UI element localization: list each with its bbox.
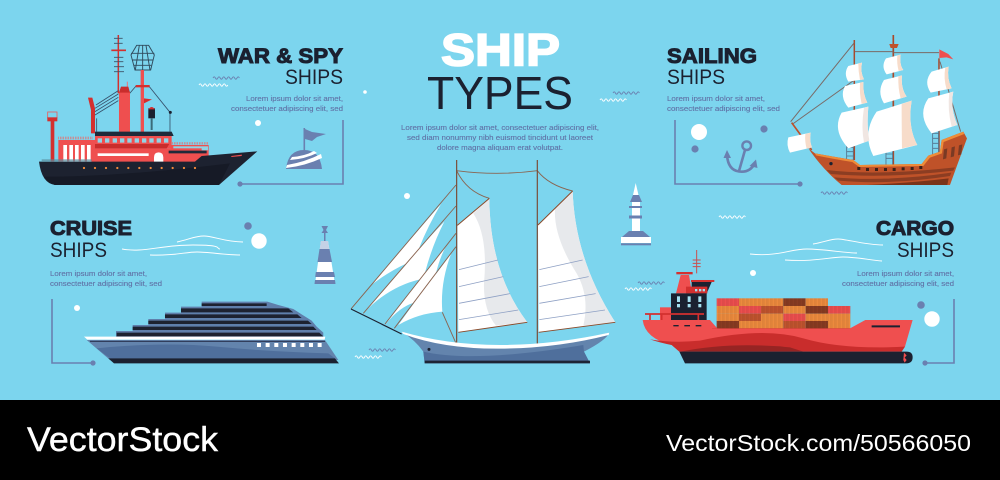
bent pipe <box>88 98 95 133</box>
heading: war and spy ships: SHIPS <box>285 66 343 89</box>
radar mast <box>136 70 152 133</box>
sailing ship <box>787 35 967 185</box>
upper decks <box>116 302 323 337</box>
intro text block: dolore magna aliquam erat volutpat. <box>437 143 563 152</box>
heading: sailing ships: Lorem ipsum dolor sit amet, <box>667 94 765 103</box>
heading: sailing ships: SAILING <box>667 45 757 68</box>
heading: cruise ships: CRUISE <box>50 218 132 240</box>
heading: cargo ships: consectetuer adipiscing elit, sed <box>842 279 954 288</box>
heading: cargo ships: CARGO <box>876 218 954 240</box>
title: TYPES <box>427 67 573 119</box>
foresails <box>363 204 451 325</box>
icon: striped buoy <box>314 226 336 284</box>
watermark bar: VectorStock <box>27 421 219 459</box>
icon: anchor <box>724 141 758 172</box>
intro text block: Lorem ipsum dolor sit amet, consectetuer adipiscing elit, <box>401 123 599 132</box>
heading: sailing ships <box>667 45 780 113</box>
red hull <box>643 320 913 363</box>
heading: war and spy ships: WAR & SPY <box>218 45 343 68</box>
masts <box>457 160 537 344</box>
central schooner <box>351 160 615 363</box>
intro text block: sed diam nonummy nibh euismod tincidunt ut laoreet <box>407 133 593 142</box>
watermark bar <box>0 400 1000 480</box>
lower hull <box>84 337 339 363</box>
intro text block <box>401 123 599 152</box>
funnel <box>119 87 130 133</box>
heading: war and spy ships: consectetuer adipiscing elit, sed <box>231 104 343 113</box>
title: SHIP <box>441 24 560 76</box>
sail shading <box>805 55 957 149</box>
heading: cruise ships: Lorem ipsum dolor sit amet, <box>50 269 147 278</box>
heading: cargo ships <box>842 218 954 288</box>
rear mast <box>47 112 57 162</box>
bowsprit <box>351 309 402 334</box>
antenna mast <box>111 35 127 93</box>
heading: sailing ships: SHIPS <box>667 66 725 89</box>
main sails <box>457 191 615 332</box>
heading: war and spy ships <box>218 45 343 113</box>
wooden hull <box>808 132 967 185</box>
rigging <box>95 86 170 132</box>
bridge <box>645 272 714 322</box>
watermark bar: VectorStock.com/50566050 <box>666 430 971 456</box>
heading: cruise ships: SHIPS <box>50 239 107 262</box>
title <box>427 24 573 119</box>
hull <box>39 151 257 185</box>
schooner hull <box>402 332 609 363</box>
heading: sailing ships: consectetuer adipiscing elit, sed <box>667 104 780 113</box>
cruise ship <box>84 302 339 363</box>
heading: cruise ships: consectetuer adipiscing elit, sed <box>50 279 162 288</box>
heading: cargo ships: SHIPS <box>897 239 954 262</box>
cargo ship <box>643 250 913 363</box>
antenna <box>693 250 701 273</box>
main superstructure <box>95 132 209 162</box>
heading: war and spy ships: Lorem ipsum dolor sit amet, <box>246 94 343 103</box>
war and spy ship <box>39 35 257 185</box>
crow's nest and flag <box>889 44 953 59</box>
icon: lighthouse <box>621 183 651 245</box>
heading: cruise ships <box>50 218 162 288</box>
containers <box>717 298 850 329</box>
lamp <box>148 107 155 130</box>
icon: flag buoy <box>286 128 326 169</box>
masts and rigging <box>791 35 961 167</box>
stays <box>351 171 573 343</box>
radar globe <box>131 45 154 70</box>
rear deck house <box>58 138 95 163</box>
heading: cargo ships: Lorem ipsum dolor sit amet, <box>857 269 954 278</box>
sails <box>787 55 957 156</box>
